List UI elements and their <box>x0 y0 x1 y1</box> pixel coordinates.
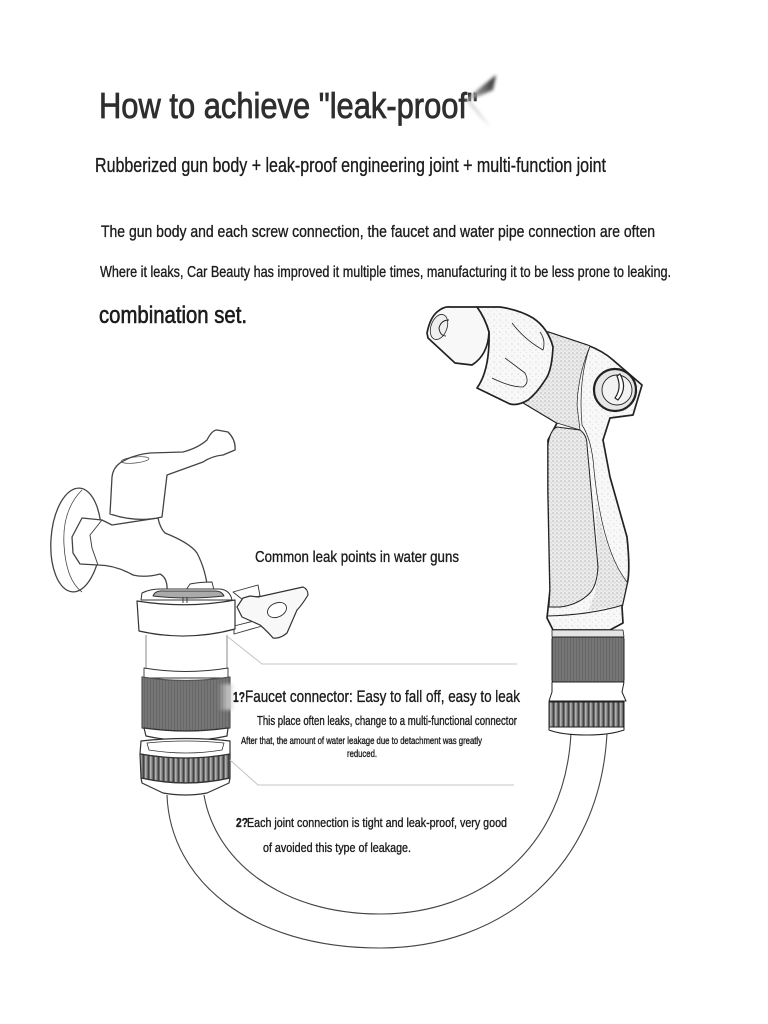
faucet spout <box>72 518 208 592</box>
gun grip <box>548 427 598 607</box>
point 1 text line 3: reduced. <box>347 749 377 760</box>
wall plate <box>47 486 105 594</box>
point 2 text line 1: Each joint connection is tight and leak-proof, very good <box>247 815 507 830</box>
gun lower grip shading <box>588 500 627 611</box>
point 1 heading: Faucet connector: Easy to fall off, easy to leak <box>245 688 521 706</box>
connector bottom ring <box>141 778 230 795</box>
nozzle sleeve <box>477 307 553 404</box>
connector lower ring <box>140 738 230 759</box>
point 1 number: 1? <box>233 689 245 706</box>
icon: faucet <box>47 430 235 594</box>
gun ring spacer <box>549 682 626 701</box>
connector body ring <box>144 668 228 678</box>
intro text line 3: combination set. <box>99 302 247 329</box>
nozzle hole <box>439 320 449 336</box>
point 1 text line 1: This place often leaks, change to a multi-functional connector <box>257 714 517 728</box>
connector collar <box>137 600 235 636</box>
title: How to achieve "leak-proof" <box>99 85 478 126</box>
handle ridge <box>121 456 149 464</box>
gun collar <box>552 630 624 637</box>
smudge by connector <box>218 684 236 710</box>
connector spacer <box>144 728 228 740</box>
leader line: lower <box>230 760 514 785</box>
lever handle <box>237 587 308 638</box>
gun rubber neck <box>522 332 590 430</box>
nozzle tip <box>427 307 489 365</box>
gun grip lower band <box>547 605 623 616</box>
top rim gasket <box>153 591 224 598</box>
hex neck <box>90 520 102 565</box>
connector lower knurled ring <box>140 754 230 783</box>
lever clamp <box>233 585 262 634</box>
icon: faucet connector <box>137 582 308 795</box>
icon: spray gun <box>427 307 642 735</box>
gun lower ring <box>549 727 624 735</box>
connector knurled ring <box>142 677 230 731</box>
title smudge <box>465 75 496 127</box>
plate inner edge <box>64 490 82 592</box>
subtitle: Rubberized gun body + leak-proof engineering joint + multi-function joint <box>95 155 606 177</box>
connector ring cutout <box>147 741 224 753</box>
intro text line 1: The gun body and each screw connection, the faucet and water pipe connection are often <box>101 222 655 241</box>
point 1 text line 2: After that, the amount of water leakage due to detachment was greatly <box>241 736 482 747</box>
point 2 number: 2? <box>236 815 248 830</box>
lever hole <box>265 599 289 621</box>
point 2 text line 2: of avoided this type of leakage. <box>263 840 411 855</box>
faucet handle <box>110 430 235 519</box>
chart label: Common leak points in water guns <box>255 549 459 566</box>
gun lower knurled ring <box>549 702 624 727</box>
nozzle opening <box>427 312 451 342</box>
gun body <box>522 332 642 630</box>
gun dial <box>594 369 636 411</box>
rim segments <box>183 597 187 603</box>
connector top rim <box>141 589 232 600</box>
sleeve ribs <box>492 323 544 387</box>
gun side line <box>581 346 627 582</box>
hose <box>167 733 607 948</box>
leader line: upper <box>228 637 517 664</box>
connector body <box>146 635 227 677</box>
gun knurled ring <box>552 637 624 682</box>
back tab <box>186 582 214 590</box>
